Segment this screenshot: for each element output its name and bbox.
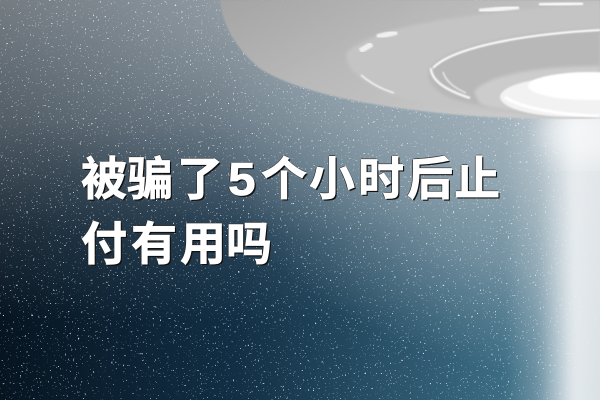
flying saucer — [220, 0, 600, 119]
title line 1: 小 — [309, 153, 355, 205]
light beam — [500, 95, 600, 400]
title line 1: 个 — [261, 153, 307, 205]
title line 1: 了 — [177, 153, 223, 205]
title line 1: 5 — [228, 153, 256, 205]
title line 2: 有 — [131, 218, 177, 270]
saucer lights — [360, 3, 600, 98]
title line 2: 吗 — [226, 218, 272, 270]
title line 1: 被 — [81, 153, 127, 205]
title line 1 — [80, 153, 500, 205]
title line 1: 止 — [454, 153, 500, 205]
title line 1: 骗 — [127, 153, 173, 205]
title line 2: 付 — [81, 218, 127, 270]
title line 1: 后 — [407, 153, 453, 205]
title line 2 — [81, 218, 272, 270]
saucer bottom glow — [500, 72, 600, 117]
title line 2: 用 — [180, 218, 226, 270]
title line 1: 时 — [358, 153, 404, 205]
